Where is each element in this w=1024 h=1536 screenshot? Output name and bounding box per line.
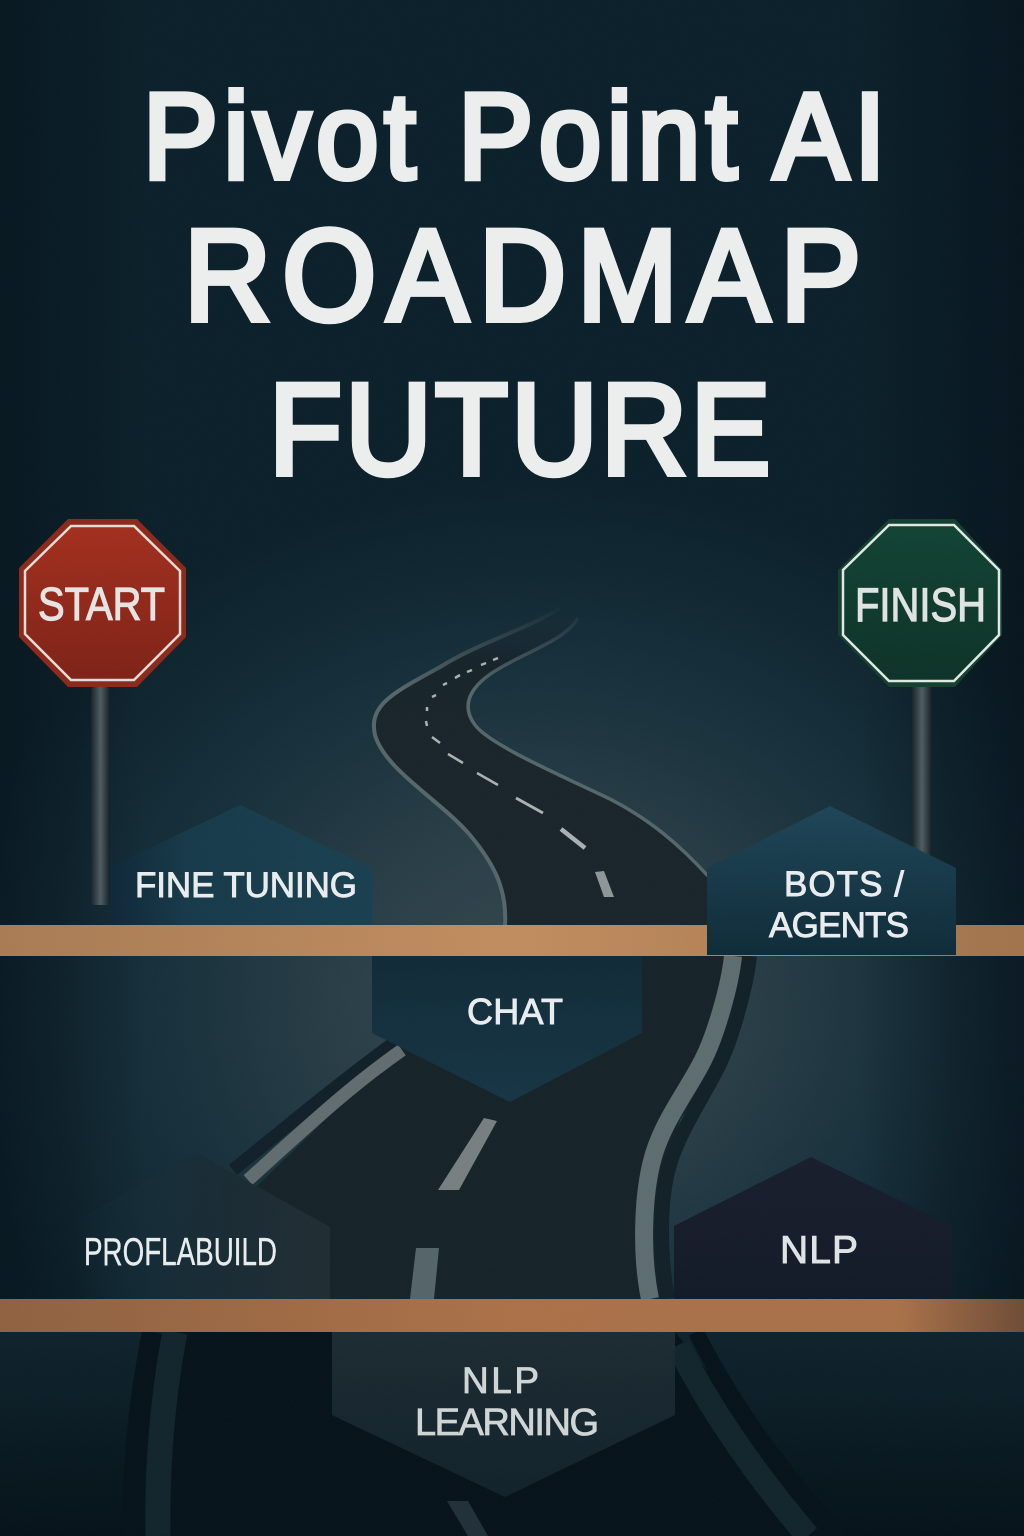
panel: chat [372, 956, 642, 1102]
panel: fine tuning [112, 805, 372, 925]
label: learning: LEARNING [415, 1402, 599, 1444]
label: fine tuning: FINE TUNING [135, 866, 357, 905]
lower area darkening [0, 1332, 1024, 1536]
start sign [19, 519, 186, 687]
title [143, 68, 885, 502]
divider bar: lower [0, 1299, 1024, 1332]
start sign pole [91, 687, 110, 905]
label: nlp: NLP [780, 1229, 858, 1272]
label: chat: CHAT [467, 991, 563, 1032]
finish sign pole [912, 687, 932, 857]
divider bar: upper [0, 925, 1024, 956]
label: finish: FINISH [855, 578, 986, 631]
label: proflabuild: PROFLABUILD [84, 1231, 277, 1274]
panel: nlp [674, 1157, 952, 1299]
label: agents: AGENTS [769, 906, 909, 945]
road below lower bar [133, 1332, 845, 1536]
lower road dashes [438, 1118, 497, 1190]
finish sign [838, 519, 1002, 687]
panel: bots and agents [707, 806, 956, 955]
title line: FUTURE: FUTURE [269, 357, 770, 502]
lower road [233, 956, 750, 1299]
title line: Pivot Point AI: Pivot Point AI [143, 68, 885, 204]
label: start: START [38, 578, 165, 630]
panel: nlp learning [332, 1332, 675, 1497]
title line: ROADMAP: ROADMAP [184, 202, 861, 348]
upper road [374, 605, 712, 925]
panel: proflabuild [70, 1152, 330, 1299]
label: nlp: NLP [462, 1360, 539, 1401]
road centre dashes [426, 658, 585, 848]
label: bots: BOTS / [784, 865, 904, 904]
